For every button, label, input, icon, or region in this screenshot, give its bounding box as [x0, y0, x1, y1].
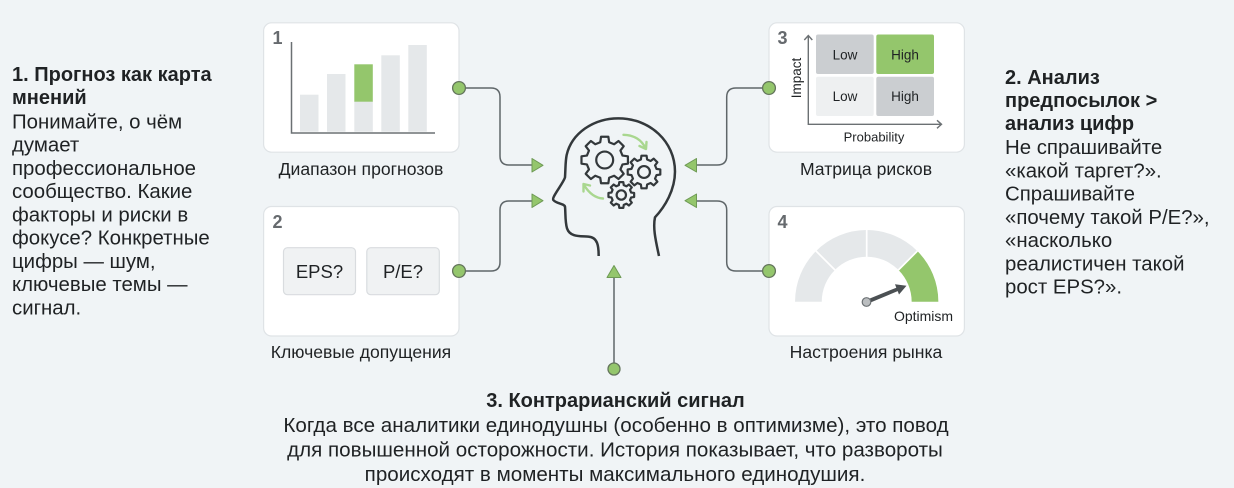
P/E box: P/E? [383, 261, 423, 282]
gauge: Optimism [894, 308, 953, 324]
panel 3: risk matrix: 3 [778, 28, 788, 48]
text block: forecast as opinion map: мнений [12, 87, 87, 109]
panel 3: risk matrix [769, 23, 964, 179]
EPS box: EPS? [296, 261, 343, 282]
panel 4: market sentiment: 4 [778, 212, 788, 232]
green rotation arrows [584, 135, 646, 198]
text block: analyse assumptions [1005, 67, 1210, 298]
text block: contrarian signal: 3. Контрарианский сигнал [486, 390, 745, 412]
text block: forecast as opinion map: ключевые темы — [12, 274, 188, 296]
panel 3: risk matrix: Матрица рисков [800, 159, 932, 179]
head outline [553, 118, 675, 256]
text block: contrarian signal: для повышенной осторожности. История показывает, что развороты [287, 438, 943, 462]
small gear [608, 182, 634, 208]
axes: Impact [789, 57, 804, 98]
text block: analyse assumptions: «какой таргет?». [1005, 160, 1162, 182]
text block: analyse assumptions: 2. Анализ [1005, 67, 1100, 89]
matrix grid [816, 34, 934, 116]
text block: analyse assumptions: «почему такой P/E?», [1005, 207, 1210, 229]
matrix grid: Low [833, 89, 858, 104]
text block: contrarian signal [283, 390, 949, 486]
panel 1: forecast range: Диапазон прогнозов [279, 159, 443, 179]
arrow: panel 1 to head [453, 82, 543, 172]
matrix grid: Low [833, 48, 858, 62]
text block: forecast as opinion map: Понимайте, о чём [12, 112, 182, 134]
needle [862, 284, 906, 306]
panel 4: market sentiment [769, 206, 964, 362]
panel 2: key assumptions: Ключевые допущения [271, 342, 451, 362]
medium gear [628, 156, 660, 188]
arrow: panel 2 to head [453, 194, 543, 277]
text block: forecast as opinion map: сигнал. [12, 298, 81, 320]
text block: analyse assumptions: Не спрашивайте [1005, 137, 1162, 159]
panel 1: forecast range: 1 [272, 28, 283, 48]
text block: analyse assumptions: реалистичен такой [1005, 254, 1184, 276]
text block: analyse assumptions: Спрашивайте [1005, 184, 1135, 206]
icon: head with gears [553, 118, 675, 256]
text block: analyse assumptions: предпосылок > [1005, 90, 1157, 112]
text block: forecast as opinion map: 1. Прогноз как карта [12, 64, 212, 86]
text block: forecast as opinion map: факторы и риски в [12, 204, 188, 226]
text block: forecast as opinion map: сообщество. Какие [12, 181, 192, 203]
panel 1: forecast range [264, 23, 459, 179]
text block: forecast as opinion map: фокусе? Конкретные [12, 228, 210, 250]
panel 2: key assumptions: 2 [272, 212, 283, 232]
text block: analyse assumptions: рост EPS?». [1005, 276, 1122, 298]
arrow: panel 4 to head [685, 194, 775, 277]
axes [789, 36, 942, 144]
panel 2: key assumptions [264, 206, 459, 362]
gauge [808, 229, 953, 324]
text block: forecast as opinion map: профессиональное [12, 158, 196, 180]
arrow: bottom text to head [607, 266, 621, 375]
panel 4: market sentiment: Настроения рынка [790, 342, 943, 362]
large gear [581, 137, 628, 183]
text block: forecast as opinion map: цифры — шум, [12, 251, 156, 273]
matrix grid: High [891, 89, 919, 104]
EPS box [284, 248, 356, 295]
bar chart [292, 42, 435, 133]
matrix grid: High [891, 48, 919, 62]
text block: forecast as opinion map: думает [12, 134, 79, 156]
P/E box [367, 248, 439, 295]
text block: forecast as opinion map [12, 64, 212, 320]
text block: analyse assumptions: анализ цифр [1005, 113, 1134, 135]
text block: analyse assumptions: «насколько [1005, 230, 1112, 252]
text block: contrarian signal: происходят в моменты максимального единодушия. [365, 463, 865, 486]
text block: contrarian signal: Когда все аналитики единодушны (особенно в оптимизме), это повод [283, 414, 949, 437]
arrow: panel 3 to head [685, 82, 775, 172]
axes: Probability [844, 130, 905, 144]
